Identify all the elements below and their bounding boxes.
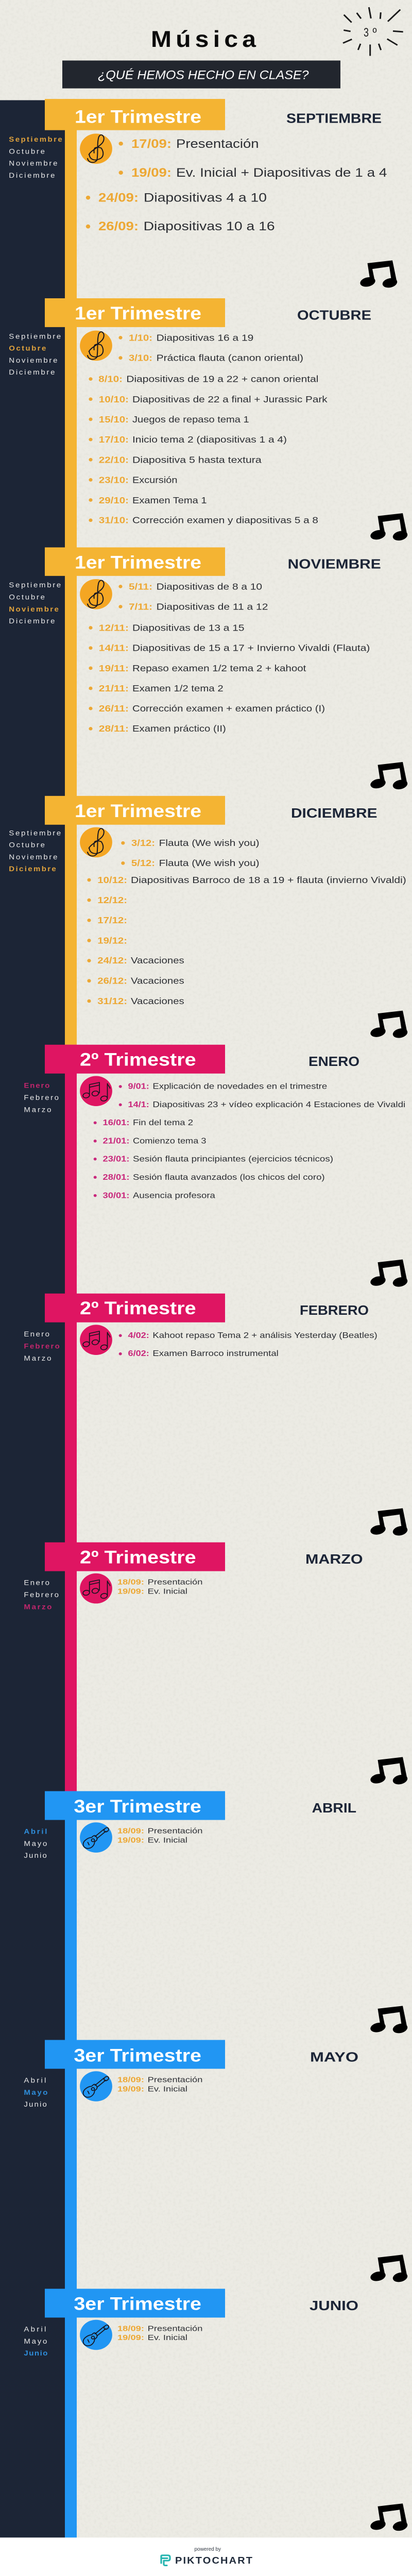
icon: music notes: [369, 1011, 408, 1039]
panel: septiembre: [9, 99, 398, 289]
activity list: 14/11:: [99, 642, 129, 653]
activity list: Flauta (We wish you): [159, 838, 260, 848]
activity list: 5/12:: [131, 858, 155, 868]
trimester band: [45, 796, 225, 825]
activity list: 21/11:: [99, 683, 129, 693]
icon: music notes: [369, 2255, 408, 2283]
activity list: Diapositivas 16 a 19: [157, 332, 253, 343]
month heading: MAYO: [310, 2049, 358, 2064]
activity list: [117, 1578, 202, 1596]
icon: treble clef: [80, 827, 112, 857]
month navigation: Enero: [24, 1331, 49, 1338]
month navigation: Octubre: [9, 841, 45, 849]
month heading: SEPTIEMBRE: [286, 111, 382, 126]
grade badge with sunburst: º: [372, 26, 376, 40]
month navigation: Noviembre: [9, 605, 59, 614]
activity list: 12/12:: [97, 895, 127, 905]
activity list: [89, 332, 328, 526]
icon: music notes: [359, 260, 398, 289]
activity list: [94, 1082, 405, 1200]
panel: marzo: [24, 1543, 408, 1786]
activity list: Diapositivas de 8 a 10: [157, 581, 262, 591]
activity list: 31/10:: [99, 515, 129, 526]
subtitle banner: [62, 60, 340, 89]
month navigation: Junio: [24, 2101, 47, 2109]
activity list: 31/12:: [97, 996, 127, 1006]
activity list: Presentación: [176, 137, 259, 151]
activity list: Vacaciones: [131, 996, 184, 1006]
activity list: 19/09:: [117, 2085, 144, 2093]
activity list: 12/11:: [99, 622, 129, 633]
activity list: 22/10:: [99, 454, 129, 465]
grade badge with sunburst: 3: [364, 26, 369, 40]
activity list: 10/10:: [99, 394, 129, 404]
activity list: 17/10:: [99, 434, 129, 445]
activity list: [117, 2076, 202, 2093]
month navigation: [24, 2326, 48, 2358]
trimester band: [45, 1543, 225, 1571]
activity list: [89, 581, 370, 734]
trimester band: [45, 1294, 225, 1323]
activity list: Ev. Inicial: [148, 1587, 187, 1596]
activity list: 19/12:: [97, 935, 127, 945]
month heading: OCTUBRE: [297, 308, 371, 323]
month heading: FEBRERO: [300, 1303, 369, 1318]
icon: music notes: [369, 513, 408, 542]
month navigation: Noviembre: [9, 853, 57, 861]
month navigation: Noviembre: [9, 357, 57, 365]
activity list: 8/10:: [98, 374, 123, 384]
icon: treble clef: [80, 133, 112, 164]
month navigation: Septiembre: [9, 829, 61, 837]
navy sidebar: [0, 100, 65, 2537]
activity list: 18/09:: [117, 1578, 144, 1587]
activity list: [117, 1827, 202, 1844]
month navigation: Octubre: [9, 148, 45, 156]
month navigation: Mayo: [24, 2337, 47, 2346]
activity list: 26/12:: [97, 975, 127, 986]
trimester band: [45, 2289, 225, 2317]
activity list: 18/09:: [117, 1827, 144, 1835]
panel: noviembre: [9, 547, 408, 791]
activity list: Sesión flauta avanzados (los chicos del coro): [133, 1173, 325, 1182]
month navigation: Marzo: [24, 1106, 52, 1114]
trimester band: 3er Trimestre: [74, 1796, 201, 1817]
activity list: 30/01:: [102, 1192, 129, 1200]
month navigation: Diciembre: [9, 618, 55, 625]
month navigation: Enero: [24, 1082, 50, 1090]
trimester band: [45, 547, 225, 576]
activity list: Examen 1/2 tema 2: [132, 683, 224, 693]
activity list: 9/01:: [128, 1082, 149, 1091]
subtitle banner: ¿QUÉ HEMOS HECHO EN CLASE?: [98, 69, 309, 82]
month navigation: Febrero: [24, 1591, 59, 1599]
activity list: Ev. Inicial + Diapositivas de 1 a 4: [176, 166, 387, 180]
activity list: Sesión flauta principiantes (ejercicios técnicos): [133, 1155, 333, 1163]
month navigation: Diciembre: [9, 866, 56, 873]
activity list: Explicación de novedades en el trimestre: [152, 1082, 327, 1091]
trimester band: [45, 99, 225, 130]
trimester band: 1er Trimestre: [75, 106, 201, 127]
activity list: 19/11:: [99, 663, 129, 673]
icon: music notes: [369, 2503, 408, 2532]
activity list: 15/10:: [99, 414, 129, 425]
icon: music notes: [369, 1757, 408, 1786]
activity list: Diapositiva 5 hasta textura: [132, 454, 262, 465]
activity list: Juegos de repaso tema 1: [132, 414, 249, 425]
month navigation: Junio: [24, 2349, 48, 2358]
month navigation: [24, 1828, 47, 1860]
panel: diciembre: [9, 796, 408, 1039]
trimester band: 2º Trimestre: [80, 1298, 196, 1318]
activity list: Examen Tema 1: [132, 495, 207, 505]
activity list: Examen práctico (II): [132, 723, 226, 734]
footer: powered by piktochart: PIKTOCHART: [175, 2556, 252, 2566]
footer: powered by piktochart: [0, 2537, 412, 2576]
activity list: 14/1:: [128, 1100, 149, 1109]
activity list: 16/01:: [102, 1118, 129, 1127]
activity list: Vacaciones: [131, 955, 184, 965]
month heading: DICIEMBRE: [291, 806, 377, 821]
icon: guitar circle: [80, 2320, 112, 2350]
activity list: 19/09:: [117, 1587, 144, 1596]
activity list: 17/09:: [131, 137, 171, 151]
activity list: [86, 137, 387, 233]
icon: music notes: [369, 762, 408, 791]
activity list: Diapositivas 23 + vídeo explicación 4 Estaciones de Vivaldi: [152, 1100, 405, 1109]
month navigation: Mayo: [24, 2089, 48, 2097]
trimester band: 1er Trimestre: [75, 303, 201, 324]
month navigation: Abril: [24, 2077, 46, 2084]
trimester band: [45, 2040, 225, 2069]
activity list: Comienzo tema 3: [133, 1137, 207, 1145]
month navigation: [24, 1331, 60, 1363]
activity list: Ev. Inicial: [148, 1836, 187, 1844]
month navigation: [24, 1082, 59, 1114]
activity list: Examen Barroco instrumental: [152, 1350, 279, 1358]
month heading: JUNIO: [310, 2298, 358, 2313]
activity list: 18/09:: [117, 2325, 144, 2333]
activity list: 10/12:: [97, 874, 127, 885]
activity list: 24/12:: [97, 955, 127, 965]
activity list: 29/10:: [99, 495, 129, 505]
activity list: Kahoot repaso Tema 2 + análisis Yesterday (Beatles): [152, 1331, 377, 1340]
activity list: Diapositivas 10 a 16: [144, 219, 275, 233]
month navigation: Octubre: [9, 345, 46, 352]
icon: treble clef: [80, 579, 112, 609]
month navigation: [9, 829, 61, 873]
month navigation: Octubre: [9, 594, 45, 601]
activity list: 26/09:: [98, 219, 139, 233]
trimester band: [45, 298, 225, 327]
month heading: ENERO: [308, 1054, 359, 1069]
icon: music notes: [369, 2006, 408, 2035]
trimester band: 1er Trimestre: [75, 801, 201, 821]
activity list: Corrección examen + examen práctico (I): [132, 703, 325, 714]
activity list: 1/10:: [129, 332, 152, 343]
activity list: Ev. Inicial: [148, 2334, 187, 2342]
activity list: 18/09:: [117, 2076, 144, 2084]
activity list: [87, 838, 406, 1006]
activity list: Diapositivas de 22 a final + Jurassic Park: [132, 394, 328, 404]
panel: mayo: [24, 2040, 408, 2283]
panel: octubre: [9, 298, 408, 542]
activity list: Práctica flauta (canon oriental): [157, 352, 303, 363]
activity list: Presentación: [148, 2076, 202, 2084]
activity list: 3/12:: [131, 838, 155, 848]
month navigation: Abril: [24, 2326, 46, 2333]
month navigation: [9, 582, 61, 625]
icon: music notes circle: [80, 1325, 112, 1355]
icon: guitar circle: [80, 1822, 112, 1853]
month heading: NOVIEMBRE: [288, 556, 381, 571]
month navigation: Febrero: [24, 1343, 60, 1350]
activity list: 19/09:: [117, 1836, 144, 1844]
activity list: Diapositivas de 15 a 17 + Invierno Vivaldi (Flauta): [132, 642, 370, 653]
activity list: Diapositivas de 19 a 22 + canon oriental: [126, 374, 318, 384]
timeline bar: second trimester: [65, 1045, 77, 1791]
month navigation: Enero: [24, 1579, 49, 1587]
activity list: Presentación: [148, 2325, 202, 2333]
month navigation: Marzo: [24, 1354, 52, 1363]
month navigation: [9, 135, 62, 180]
month navigation: [24, 2077, 48, 2109]
icon: piktochart logo: [161, 2555, 170, 2565]
activity list: 28/01:: [102, 1173, 129, 1182]
activity list: Presentación: [148, 1578, 202, 1587]
timeline bar: third trimester: [65, 1791, 77, 2537]
activity list: 19/09:: [117, 2334, 144, 2342]
activity list: 17/12:: [97, 915, 127, 925]
activity list: Presentación: [148, 1827, 202, 1835]
activity list: Excursión: [132, 474, 177, 485]
activity list: 26/11:: [99, 703, 129, 714]
activity list: 23/01:: [102, 1155, 129, 1163]
trimester band: 3er Trimestre: [74, 2045, 201, 2065]
month navigation: Febrero: [24, 1094, 59, 1102]
activity list: Flauta (We wish you): [159, 858, 260, 868]
trimester band: 2º Trimestre: [80, 1547, 196, 1567]
month navigation: Diciembre: [9, 172, 55, 180]
month navigation: Septiembre: [9, 135, 62, 144]
icon: treble clef: [80, 331, 112, 361]
icon: music notes: [369, 1508, 408, 1537]
trimester band: 1er Trimestre: [75, 552, 201, 572]
month navigation: Mayo: [24, 1840, 47, 1848]
panel: febrero: [24, 1294, 408, 1537]
month navigation: [9, 333, 61, 377]
month navigation: Diciembre: [9, 369, 55, 377]
activity list: Ev. Inicial: [148, 2085, 187, 2093]
month navigation: [24, 1579, 59, 1611]
trimester band: [45, 1791, 225, 1820]
activity list: 4/02:: [128, 1331, 149, 1340]
month heading: MARZO: [305, 1552, 363, 1567]
icon: music notes circle: [80, 1573, 112, 1603]
activity list: Fin del tema 2: [133, 1118, 193, 1127]
activity list: 6/02:: [128, 1350, 149, 1358]
panel: junio: [24, 2289, 408, 2532]
trimester band: 3er Trimestre: [74, 2294, 201, 2314]
panel: abril: [24, 1791, 408, 2035]
month navigation: Septiembre: [9, 582, 61, 589]
activity list: 19/09:: [131, 166, 171, 180]
activity list: Inicio tema 2 (diapositivas 1 a 4): [132, 434, 287, 445]
activity list: [119, 1331, 377, 1358]
month navigation: Noviembre: [9, 160, 57, 168]
activity list: Diapositivas Barroco de 18 a 19 + flauta (invierno Vivaldi): [131, 874, 406, 885]
activity list: 28/11:: [99, 723, 129, 734]
activity list: Diapositivas de 13 a 15: [132, 622, 244, 633]
activity list: 5/11:: [129, 581, 152, 591]
footer: powered by piktochart: powered by: [195, 2546, 221, 2552]
activity list: 7/11:: [129, 601, 152, 612]
grade badge with sunburst: [343, 7, 403, 56]
activity list: Repaso examen 1/2 tema 2 + kahoot: [132, 663, 306, 673]
panel: enero: [24, 1045, 408, 1288]
month navigation: Junio: [24, 1852, 47, 1860]
icon: music notes: [369, 1260, 408, 1288]
activity list: 3/10:: [129, 352, 152, 363]
activity list: Diapositivas 4 a 10: [144, 191, 267, 205]
trimester band: 2º Trimestre: [80, 1049, 196, 1070]
activity list: 23/10:: [99, 474, 129, 485]
activity list: 24/09:: [98, 191, 139, 205]
trimester band: [45, 1045, 225, 1074]
activity list: Corrección examen y diapositivas 5 a 8: [132, 515, 318, 526]
icon: guitar circle: [80, 2071, 112, 2102]
activity list: Diapositivas de 11 a 12: [157, 601, 268, 612]
title: Música: [151, 26, 256, 52]
activity list: Vacaciones: [131, 975, 184, 986]
month navigation: Marzo: [24, 1603, 52, 1611]
activity list: [117, 2325, 202, 2342]
month heading: ABRIL: [312, 1801, 356, 1816]
activity list: Ausencia profesora: [133, 1192, 215, 1200]
activity list: 21/01:: [102, 1137, 129, 1145]
month navigation: Septiembre: [9, 333, 61, 341]
icon: music notes circle: [80, 1076, 112, 1106]
timeline bar: first trimester: [65, 99, 77, 1045]
month navigation: Abril: [24, 1828, 47, 1836]
